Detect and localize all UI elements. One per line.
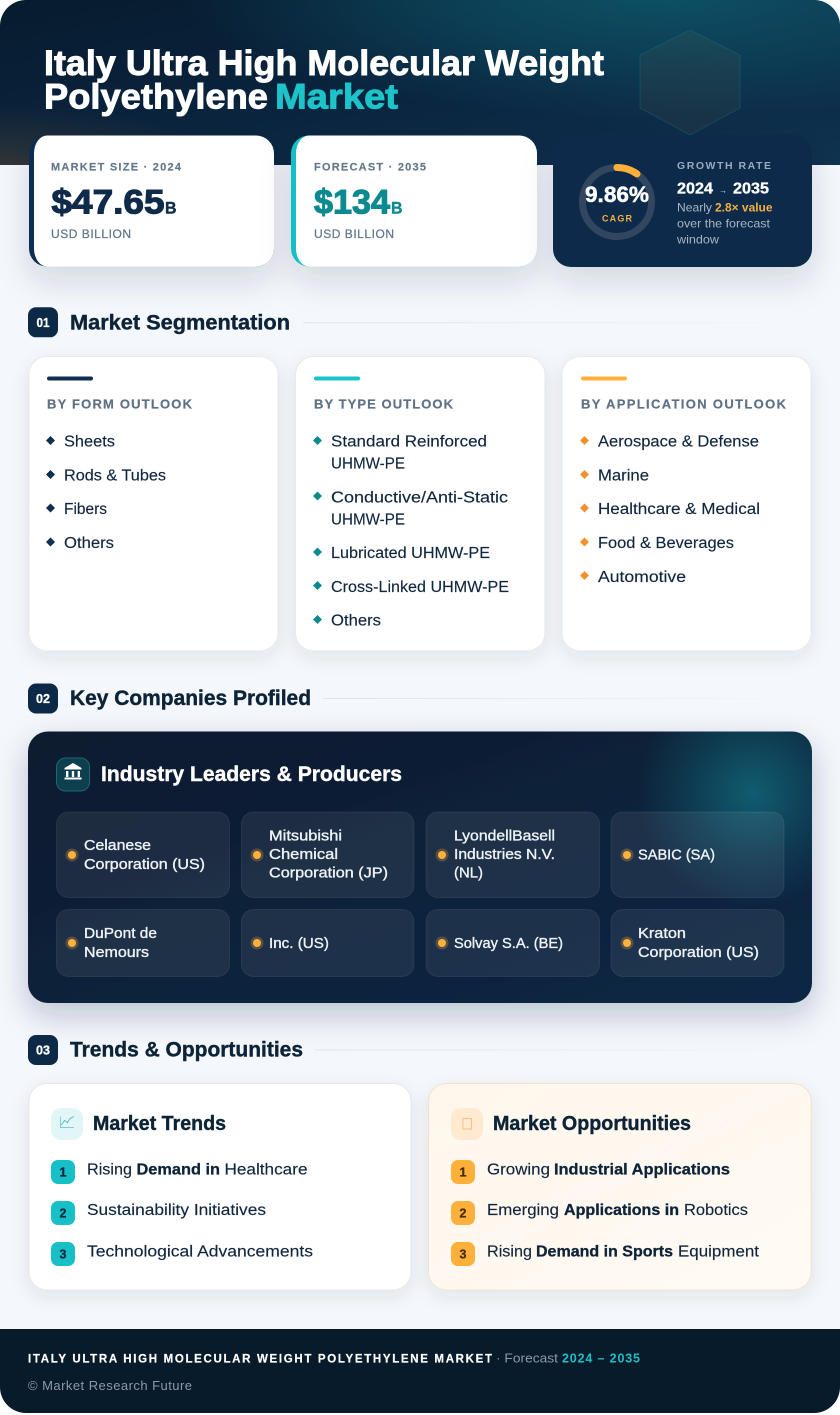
company: SABIC — [611, 812, 784, 898]
section heading 01: 01 — [36, 315, 50, 330]
footer: ITALY ULTRA HIGH MOLECULAR WEIGHT POLYETHYLENE MARKET — [28, 1353, 492, 1365]
company: Mitsubishi: Chemical — [269, 847, 338, 863]
stat card: growth rate: 2035 — [733, 181, 769, 198]
panel: market opportunities — [428, 1084, 811, 1290]
company: DuPont: DuPont de — [84, 926, 157, 942]
panel: by application outlook: BY APPLICATION OUTLOOK — [581, 397, 787, 412]
opportunity 3: Equipment — [678, 1243, 760, 1260]
section heading 02 — [28, 684, 812, 714]
panel: market trends: Market Trends — [93, 1113, 226, 1135]
opportunity 2: Emerging — [487, 1202, 559, 1219]
opportunity 1: Industrial Applications — [554, 1161, 730, 1178]
icon: line chart — [51, 1108, 83, 1140]
opportunity 2: Applications in — [564, 1202, 679, 1219]
panel: by type outlook: UHMW-PE — [331, 456, 405, 473]
company: LyondellBasell: LyondellBasell — [454, 829, 555, 845]
trend 1 — [51, 1160, 308, 1184]
section heading 01: Market Segmentation — [70, 311, 290, 334]
company: SABIC: SABIC (SA) — [638, 848, 715, 864]
opportunity 2: Robotics — [684, 1202, 748, 1219]
opportunity 3: Rising — [487, 1243, 532, 1260]
opportunity 3 — [451, 1242, 760, 1266]
CAGR ring: CAGR — [602, 214, 632, 224]
opportunity 2 — [451, 1201, 748, 1225]
panel: by form outlook: BY FORM OUTLOOK — [47, 397, 193, 412]
section heading 02: 02 — [36, 691, 50, 706]
stat card: forecast 2035 — [291, 136, 537, 266]
panel: by type outlook — [296, 356, 545, 651]
stat card: growth rate: → — [719, 186, 727, 197]
stat card: growth rate: 2024 — [677, 181, 713, 198]
title: Italy Ultra High Molecular Weight — [44, 44, 604, 83]
icon: missing glyph box — [451, 1108, 483, 1140]
panel: by type outlook: UHMW-PE — [331, 512, 405, 528]
section heading 03: 03 — [36, 1042, 50, 1058]
panel: by type outlook: Lubricated UHMW-PE — [331, 545, 490, 562]
panel: market trends — [29, 1084, 411, 1290]
stat card: forecast 2035: $134 — [314, 184, 390, 222]
stat card: growth rate: over the forecast — [677, 217, 771, 231]
company: Mitsubishi: Mitsubishi — [269, 829, 342, 845]
stat card: growth rate — [553, 135, 812, 267]
panel: by form outlook: Fibers — [64, 501, 107, 518]
panel: by application outlook: Aerospace & Defense — [598, 434, 759, 451]
opportunity 1 — [451, 1160, 730, 1184]
section heading 03 — [28, 1035, 812, 1065]
stat card: growth rate: GROWTH RATE — [677, 160, 771, 172]
stat card: market size 2024: B — [165, 198, 176, 218]
panel: by type outlook: BY TYPE OUTLOOK — [314, 397, 454, 412]
title: Market — [275, 78, 398, 117]
company: Inc.: Inc. (US) — [269, 936, 329, 952]
icon: bank building — [56, 758, 90, 791]
company: LyondellBasell — [426, 812, 600, 898]
panel: by application outlook: Marine — [598, 468, 649, 484]
trend 1: Healthcare — [224, 1161, 308, 1178]
trend 2: Sustainability Initiatives — [87, 1202, 266, 1219]
trend 2 — [51, 1201, 266, 1225]
company: LyondellBasell: (NL) — [454, 866, 483, 882]
panel: by type outlook: Conductive/Anti-Static — [331, 490, 508, 506]
panel: by form outlook: Others — [64, 535, 114, 552]
company: Solvay: Solvay S.A. (BE) — [454, 936, 563, 952]
panel: by application outlook: Healthcare & Medical — [598, 501, 760, 518]
panel heading: Industry Leaders & Producers — [101, 763, 402, 786]
opportunity 1: Growing — [487, 1161, 550, 1178]
company: Celanese: Celanese — [84, 838, 151, 854]
panel: by form outlook: Sheets — [64, 434, 115, 451]
trend 3 — [51, 1242, 313, 1266]
company: Inc. — [242, 910, 414, 976]
trend 3: 3 — [60, 1248, 67, 1262]
CAGR ring — [582, 168, 652, 236]
panel: by application outlook: Automotive — [598, 569, 686, 586]
company: Solvay — [426, 910, 600, 976]
company: Kraton — [611, 910, 784, 976]
CAGR ring: 9.86% — [585, 182, 649, 207]
stat card: forecast 2035: B — [391, 198, 402, 218]
panel: by type outlook: Standard Reinforced — [331, 434, 487, 451]
trend 2: 2 — [60, 1206, 67, 1220]
panel: by application outlook — [562, 356, 811, 651]
panel: by form outlook: Rods & Tubes — [64, 468, 166, 484]
trend 1: Demand in — [136, 1161, 220, 1178]
header banner — [0, 0, 840, 165]
company: Mitsubishi: Corporation (JP) — [269, 866, 388, 882]
company: Mitsubishi — [242, 812, 414, 898]
stat card: market size 2024: USD BILLION — [51, 227, 131, 241]
opportunity 2: 2 — [460, 1206, 467, 1220]
footer: · Forecast — [496, 1351, 559, 1365]
footer — [0, 1329, 840, 1413]
opportunity 3: Demand in Sports — [536, 1243, 673, 1260]
trend 3: Technological Advancements — [87, 1243, 313, 1260]
panel: by form outlook — [29, 356, 278, 651]
stat card: growth rate: Nearly — [677, 201, 712, 215]
company: Celanese: Corporation (US) — [84, 857, 205, 873]
company: Celanese — [56, 812, 230, 898]
opportunity 3: 3 — [460, 1248, 467, 1262]
footer: © Market Research Future — [28, 1378, 192, 1393]
stat card: growth rate: 2.8× value — [715, 201, 773, 215]
panel: by type outlook: Others — [331, 612, 381, 630]
panel: industry leaders — [28, 732, 812, 1003]
section heading 01 — [28, 307, 812, 337]
stat card: market size 2024 — [29, 136, 274, 266]
section heading 02: Key Companies Profiled — [70, 687, 311, 710]
stat card: growth rate: window — [676, 233, 719, 247]
stat card: market size 2024: $47.65 — [52, 184, 164, 222]
company: Kraton: Kraton — [638, 926, 686, 942]
panel: by type outlook: Cross-Linked UHMW-PE — [331, 579, 509, 596]
stat card: forecast 2035: FORECAST · 2035 — [314, 161, 426, 173]
stat card: market size 2024: MARKET SIZE · 2024 — [51, 161, 182, 173]
opportunity 1: 1 — [460, 1166, 467, 1180]
trend 1: 1 — [60, 1166, 67, 1180]
company: DuPont — [56, 910, 230, 976]
stat card: forecast 2035: USD BILLION — [314, 227, 394, 241]
trend 1: Rising — [87, 1161, 132, 1178]
title — [44, 44, 604, 117]
panel: by application outlook: Food & Beverages — [598, 535, 734, 552]
company: Kraton: Corporation (US) — [638, 945, 759, 961]
company: LyondellBasell: Industries N.V. — [454, 847, 555, 863]
company: DuPont: Nemours — [84, 945, 149, 961]
section heading 03: Trends & Opportunities — [70, 1039, 303, 1062]
panel: market opportunities: Market Opportunities — [493, 1113, 691, 1135]
title: Polyethylene — [44, 78, 268, 117]
footer: 2024 – 2035 — [562, 1351, 640, 1365]
